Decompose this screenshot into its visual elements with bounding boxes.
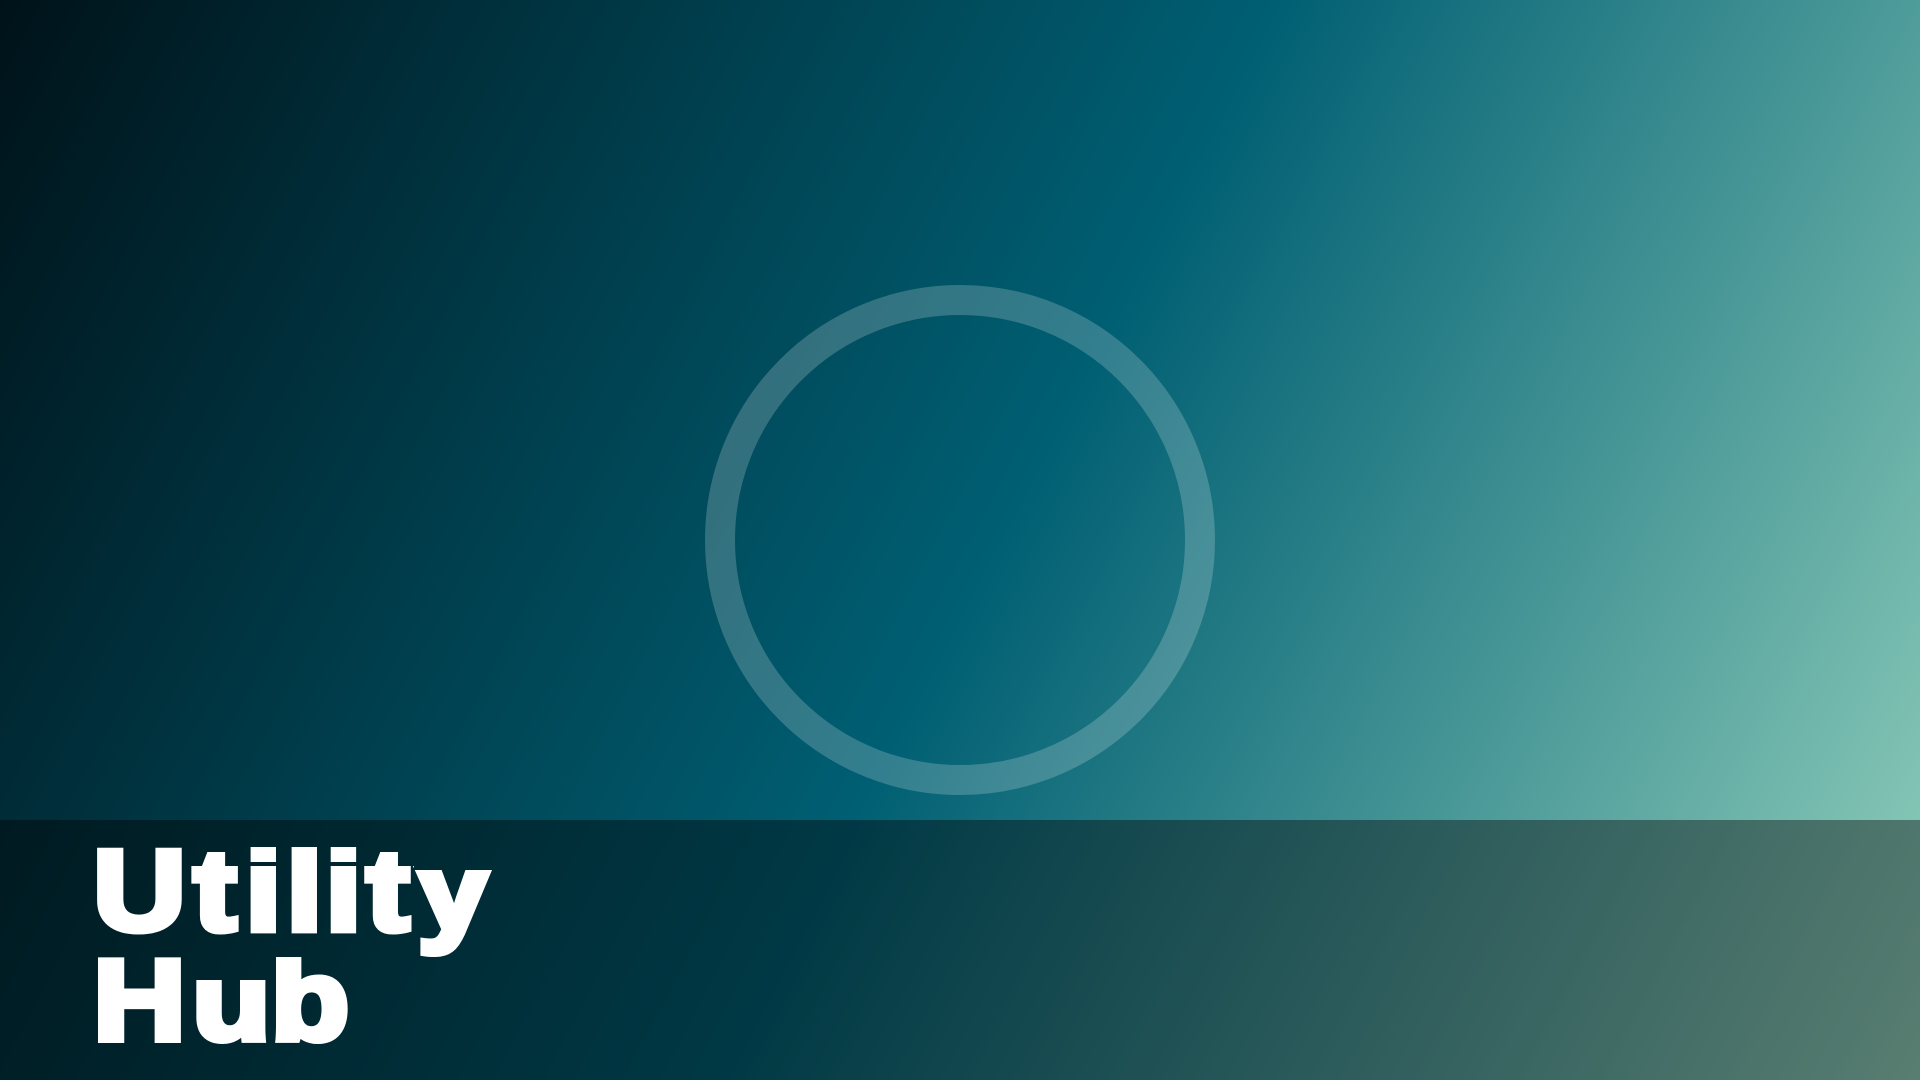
title xyxy=(97,847,492,1044)
icon: translucent ring xyxy=(705,285,1215,795)
title: Hub xyxy=(93,936,349,1064)
panel: bottom title band xyxy=(0,820,1920,1080)
title: Utility xyxy=(93,826,489,954)
